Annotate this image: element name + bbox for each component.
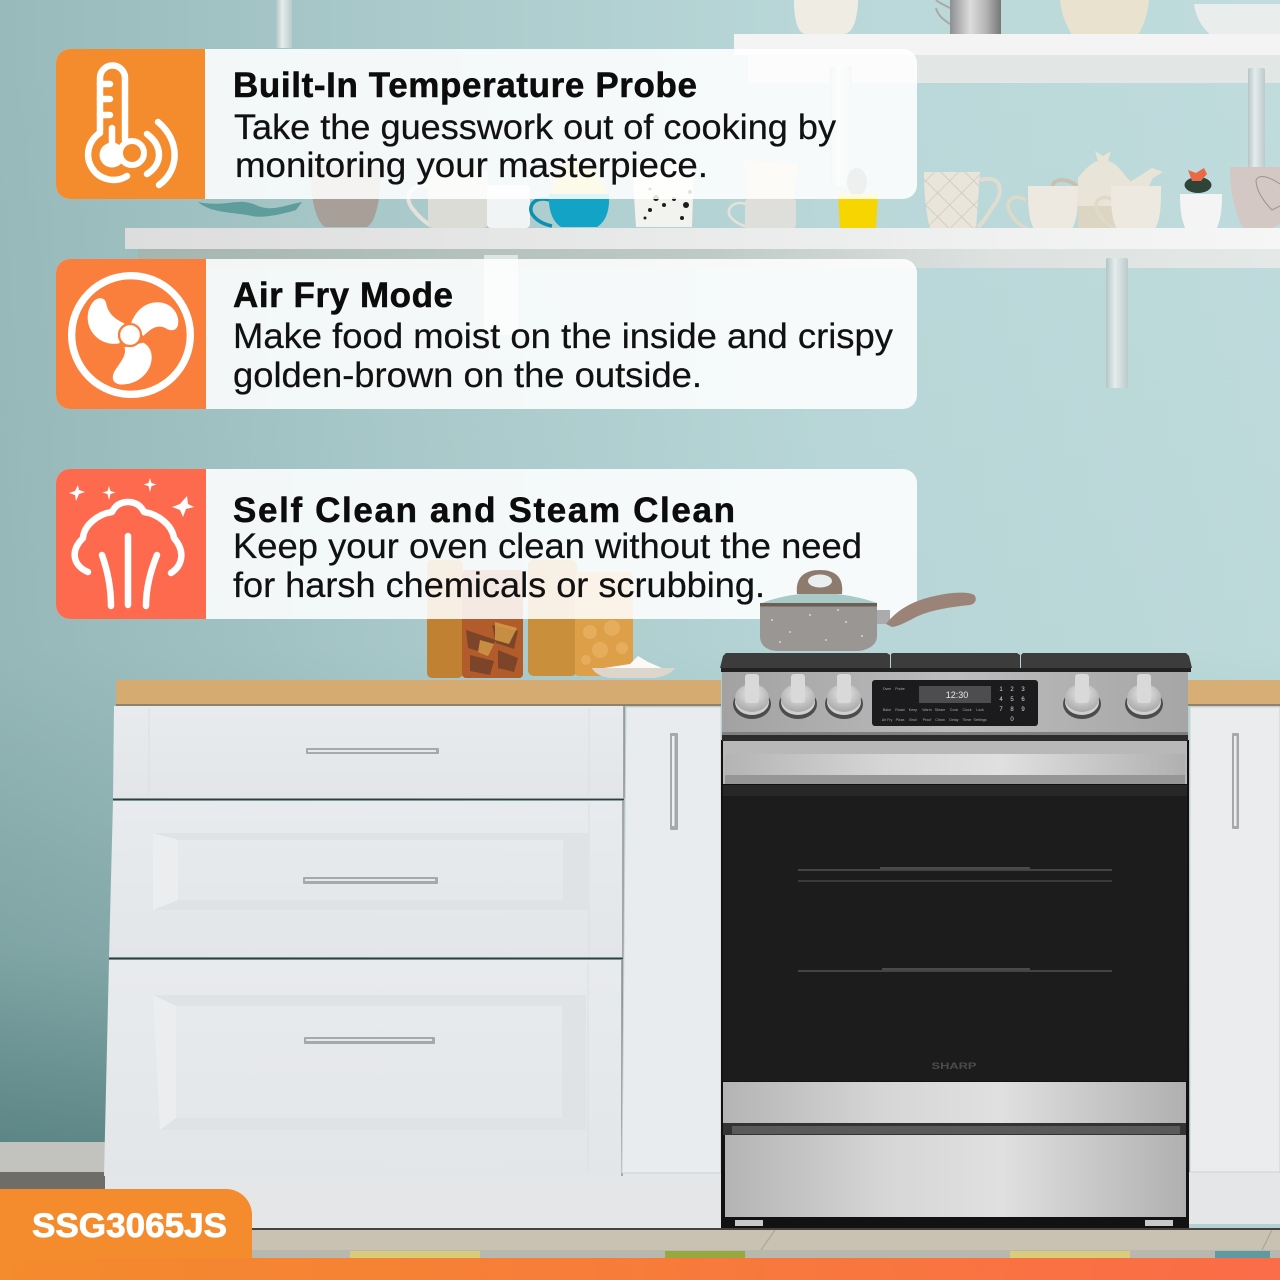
heading: Air Fry Mode xyxy=(233,276,453,315)
body text xyxy=(233,527,862,605)
icon: steam cloud with sparkles xyxy=(56,469,206,619)
display panel: 4 xyxy=(999,697,1003,703)
drawer 3 xyxy=(104,960,622,1176)
display panel: 12:30 xyxy=(946,690,968,700)
display panel: Warm xyxy=(922,708,932,712)
feature card: self clean xyxy=(56,469,917,619)
icon: fan xyxy=(56,259,206,409)
glass jars on the counter xyxy=(427,560,675,678)
display panel: Clock xyxy=(962,708,972,712)
storage drawer xyxy=(723,1123,1186,1226)
drawer gaps xyxy=(109,800,624,958)
knob 1 xyxy=(733,674,771,719)
control panel xyxy=(722,672,1188,741)
body text: golden-brown on the outside. xyxy=(233,356,702,395)
display panel: 2 xyxy=(1010,687,1014,693)
base cabinets and counter xyxy=(104,680,1280,1228)
knob 2 xyxy=(779,674,817,719)
oven door window: SHARP xyxy=(932,1061,977,1072)
display panel: Timer xyxy=(962,718,972,722)
display panel: 7 xyxy=(999,707,1003,713)
display panel: Lock xyxy=(976,708,984,712)
display panel: 0 xyxy=(1010,717,1014,723)
display panel: Bake xyxy=(883,708,891,712)
display panel xyxy=(872,680,1038,726)
body text: Take the guesswork out of cooking by xyxy=(234,108,837,147)
body text: Make food moist on the inside and crispy xyxy=(233,317,894,356)
display panel: Settings xyxy=(974,718,987,722)
cabinet door left of range xyxy=(622,707,721,1173)
body text: for harsh chemicals or scrubbing. xyxy=(233,566,765,605)
display panel: Clean xyxy=(935,718,945,722)
display panel: Pizza xyxy=(896,718,904,722)
drawer 1 xyxy=(113,706,624,798)
display panel: Delay xyxy=(949,718,959,722)
cabinet door right of range xyxy=(1190,707,1280,1172)
display panel: Cook xyxy=(950,708,958,712)
body text xyxy=(234,108,837,185)
oven handle xyxy=(723,741,1187,784)
lower door trim xyxy=(723,1082,1186,1123)
display panel: Broil xyxy=(909,718,917,722)
feature card: air fry xyxy=(56,259,917,409)
knob 5 xyxy=(1125,674,1163,719)
saucepan with lid xyxy=(760,570,976,651)
display panel: 6 xyxy=(1021,697,1025,703)
oven door window xyxy=(723,785,1187,1081)
heading: Built-In Temperature Probe xyxy=(233,66,697,105)
icon: thermometer with signal xyxy=(56,49,205,199)
bottom gradient bar xyxy=(0,1258,1280,1280)
middle shelf with cups xyxy=(125,151,1280,388)
upper shelf with dishes xyxy=(276,0,1280,186)
body text xyxy=(233,317,894,395)
display panel: Oven xyxy=(883,687,891,691)
display panel: 8 xyxy=(1010,707,1014,713)
display panel: Probe xyxy=(895,687,905,691)
body text: Keep your oven clean without the need xyxy=(233,527,862,566)
floor and skirting xyxy=(0,1142,1280,1258)
feature card: temperature probe xyxy=(56,49,917,199)
knob 3 xyxy=(825,674,863,719)
heading: Self Clean and Steam Clean xyxy=(233,491,735,530)
oven range xyxy=(720,653,1192,1228)
model number tab: SSG3065JS xyxy=(32,1207,227,1245)
body text: monitoring your masterpiece. xyxy=(235,146,708,185)
drawer 2 xyxy=(109,801,624,957)
display panel: Proof xyxy=(923,718,931,722)
display panel: 9 xyxy=(1021,707,1025,713)
display panel: 5 xyxy=(1010,697,1014,703)
display panel: Air Fry xyxy=(882,718,892,722)
display panel: 1 xyxy=(999,687,1003,693)
display panel: Keep xyxy=(909,708,917,712)
display panel: Steam xyxy=(935,708,945,712)
cooktop grates xyxy=(720,653,1192,672)
display panel: 3 xyxy=(1021,687,1025,693)
display panel: Roast xyxy=(895,708,905,712)
knob 4 xyxy=(1063,674,1101,719)
model number tab xyxy=(0,1189,252,1258)
